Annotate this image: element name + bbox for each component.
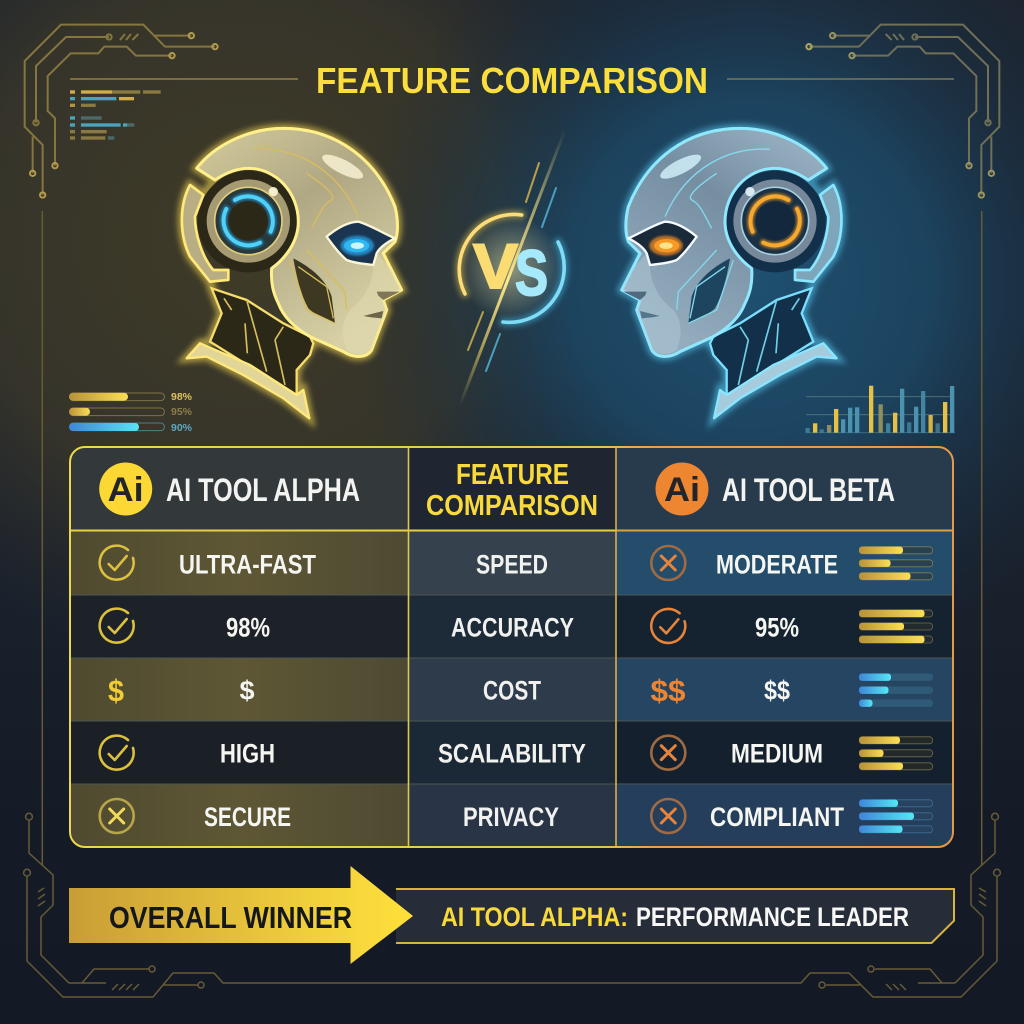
column header: feature comparison bbox=[426, 459, 598, 522]
alpha column values: ULTRA-FAST bbox=[179, 550, 316, 580]
nose and mouth bbox=[623, 292, 647, 300]
feature names bbox=[438, 550, 586, 832]
column header: AI Tool Beta: AI TOOL BETA bbox=[722, 472, 895, 508]
skull bbox=[197, 128, 402, 356]
beta column icons bbox=[650, 546, 686, 833]
result panel bbox=[396, 889, 954, 943]
mini bars: moderate bbox=[859, 546, 932, 580]
panel: comparison table bbox=[70, 447, 953, 847]
icon: blue robot head bbox=[622, 128, 841, 418]
arrow: overall winner bbox=[69, 866, 413, 964]
icon: gold robot head bbox=[182, 128, 402, 418]
ear housing bbox=[198, 171, 299, 272]
title: FEATURE COMPARISON bbox=[316, 60, 708, 101]
feature names: SPEED bbox=[476, 550, 548, 580]
alpha column values: SECURE bbox=[204, 802, 291, 832]
beta column icons: $$ bbox=[650, 673, 686, 708]
column header: feature comparison: FEATURE bbox=[456, 459, 569, 491]
face highlight plane bbox=[343, 253, 402, 354]
column header: feature comparison: COMPARISON bbox=[426, 490, 598, 522]
eye bbox=[628, 222, 697, 265]
beta column values: MEDIUM bbox=[731, 738, 823, 768]
code snippet decoration bbox=[70, 90, 161, 140]
progress bars: left: 98% bbox=[171, 392, 192, 403]
result panel: AI TOOL ALPHA: bbox=[441, 902, 628, 932]
neck bbox=[210, 288, 313, 397]
beta column values: $$ bbox=[764, 676, 790, 706]
progress bars: left: 95% bbox=[171, 407, 192, 418]
alpha column values bbox=[179, 550, 316, 832]
beta column values: MODERATE bbox=[716, 550, 838, 580]
column header: AI Tool Beta bbox=[656, 462, 895, 516]
alpha column icons bbox=[100, 546, 134, 833]
feature names: PRIVACY bbox=[463, 802, 559, 832]
column header: AI Tool Beta: Ai bbox=[664, 471, 700, 509]
mini bars: scalability bbox=[859, 736, 932, 770]
beta column values bbox=[710, 550, 844, 832]
shoulder collar bbox=[187, 343, 309, 418]
cheek vent bbox=[293, 258, 335, 323]
alpha column icons: $ bbox=[108, 673, 124, 708]
ear housing bbox=[724, 171, 826, 272]
versus badge: S bbox=[515, 237, 548, 309]
beta column values: COMPLIANT bbox=[710, 802, 844, 832]
cheek vent bbox=[688, 258, 730, 323]
versus badge: V bbox=[473, 232, 518, 302]
column header: AI Tool Alpha: AI TOOL ALPHA bbox=[166, 472, 360, 508]
mini bars: privacy bbox=[859, 800, 932, 833]
shoulder collar bbox=[714, 343, 837, 418]
circuit decoration: top right bbox=[806, 25, 999, 198]
arrow: overall winner: OVERALL WINNER bbox=[109, 900, 352, 935]
feature names: COST bbox=[483, 676, 541, 706]
mini bars: accuracy bbox=[859, 610, 932, 643]
column header: AI Tool Alpha: Ai bbox=[108, 471, 144, 509]
alpha column values: $ bbox=[239, 676, 255, 706]
bar chart: right bbox=[806, 386, 955, 433]
beta column values: 95% bbox=[755, 612, 799, 642]
highlight bbox=[657, 150, 704, 183]
progress bars: left bbox=[69, 392, 192, 434]
eye bbox=[327, 222, 395, 265]
feature names: ACCURACY bbox=[451, 612, 574, 642]
face highlight plane bbox=[622, 253, 681, 354]
progress bars: left: 90% bbox=[171, 423, 192, 434]
highlight bbox=[319, 150, 366, 183]
neck bbox=[710, 288, 813, 397]
versus badge bbox=[459, 130, 565, 405]
column header: AI Tool Alpha bbox=[99, 462, 360, 516]
circuit decoration: top left bbox=[25, 25, 218, 198]
nose and mouth bbox=[377, 292, 400, 300]
feature names: SCALABILITY bbox=[438, 738, 586, 768]
table cell backgrounds bbox=[70, 447, 953, 847]
alpha column values: HIGH bbox=[220, 738, 275, 768]
ear disc bbox=[207, 179, 290, 263]
circuit decoration: side rails and bottom bbox=[24, 211, 1000, 997]
ear disc bbox=[733, 179, 817, 263]
mini bars: cost bbox=[859, 674, 933, 707]
skull bbox=[622, 128, 827, 356]
alpha column values: 98% bbox=[226, 612, 270, 642]
result panel: PERFORMANCE LEADER bbox=[636, 902, 909, 932]
